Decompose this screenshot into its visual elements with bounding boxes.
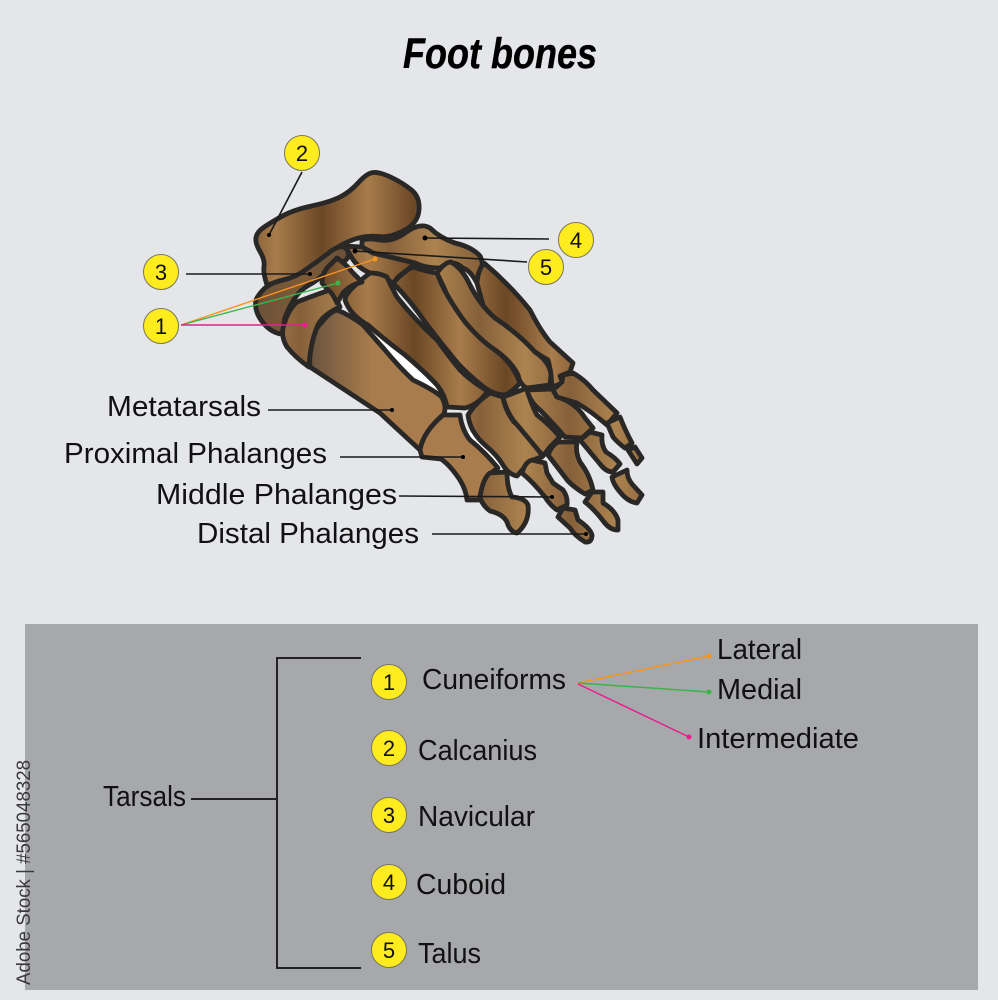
cuneiform branch: intermediate [578, 684, 859, 755]
number badge 2 on foot [284, 136, 320, 170]
item 5: talus: Talus [418, 938, 481, 970]
number badge 4 on foot: 4 [570, 228, 582, 253]
number badge 4 on foot [558, 222, 594, 258]
first proximal phalanx [420, 415, 498, 500]
item 3: navicular: 3 [383, 803, 395, 828]
foot skeleton illustration [256, 172, 642, 542]
item 5: talus [372, 932, 481, 970]
fifth distal phalanx [628, 447, 642, 464]
lateral cuneiform [345, 246, 415, 284]
fifth middle phalanx [607, 417, 632, 448]
item 1: cuneiforms: Cuneiforms [422, 664, 566, 696]
fourth middle phalanx [580, 432, 620, 472]
item 4: cuboid [372, 864, 506, 901]
bracket [191, 658, 361, 968]
item 2: calcanius: Calcanius [418, 735, 537, 767]
cuboid [362, 226, 482, 283]
third proximal phalanx [503, 388, 560, 456]
cuneiform branch: intermediate: Intermediate [697, 723, 859, 755]
fourth metatarsal [437, 262, 551, 388]
side credit text: Adobe Stock | #565048328 [14, 760, 35, 985]
medial cuneiform [283, 290, 340, 367]
label: metatarsals: Metatarsals [107, 391, 261, 423]
panel background [25, 624, 978, 990]
item 4: cuboid: 4 [383, 870, 395, 895]
cuneiform branch: lateral [578, 634, 802, 683]
item 3: navicular: Navicular [418, 801, 535, 833]
second metatarsal [345, 273, 488, 408]
title: Foot bones [403, 30, 597, 78]
item 2: calcanius [372, 730, 537, 767]
third metatarsal [393, 267, 520, 395]
calcaneus and talus [256, 172, 419, 285]
second middle phalanx [522, 460, 567, 510]
label: distal phalanges [197, 518, 588, 550]
number badge 2 on foot: 2 [296, 141, 308, 166]
intermediate cuneiform [322, 258, 362, 303]
fourth proximal phalanx [527, 389, 593, 438]
number badge 3 on foot [144, 254, 178, 290]
item 1: cuneiforms: 1 [383, 670, 395, 695]
third middle phalanx [548, 442, 593, 494]
number badge 1 on foot [144, 308, 178, 344]
fifth proximal phalanx [553, 373, 617, 425]
label: distal phalanges: Distal Phalanges [197, 518, 419, 550]
item 1: cuneiforms [372, 664, 566, 700]
first distal phalanx [480, 472, 528, 533]
number badge 5 on foot [528, 250, 564, 284]
second distal phalanx [558, 508, 592, 542]
navicular [256, 247, 349, 334]
fifth metatarsal [477, 263, 573, 387]
second proximal phalanx [468, 393, 542, 476]
label: proximal phalanges: Proximal Phalanges [64, 438, 327, 470]
white gaps between bones [360, 318, 602, 474]
label: middle phalanges: Middle Phalanges [156, 479, 397, 511]
item 2: calcanius: 2 [383, 736, 395, 761]
number badge 5 on foot: 5 [540, 255, 552, 280]
cuneiform branch: medial: Medial [717, 674, 802, 706]
third distal phalanx [585, 492, 618, 530]
number badge 1 on foot: 1 [155, 314, 167, 339]
label: proximal phalanges [64, 438, 465, 470]
item 5: talus: 5 [383, 938, 395, 963]
cuneiform branch: lateral: Lateral [717, 634, 802, 666]
tarsals label: Tarsals [103, 781, 186, 813]
panel: tarsals [25, 624, 978, 990]
first metatarsal [310, 310, 445, 450]
item 3: navicular [372, 798, 535, 833]
label: metatarsals [107, 391, 394, 423]
item 4: cuboid: Cuboid [416, 869, 506, 901]
cuneiform branch: medial [578, 674, 802, 706]
foot callout lines [181, 172, 549, 328]
label: middle phalanges [156, 479, 554, 511]
fourth distal phalanx [612, 470, 642, 503]
number badge 3 on foot: 3 [155, 260, 167, 285]
